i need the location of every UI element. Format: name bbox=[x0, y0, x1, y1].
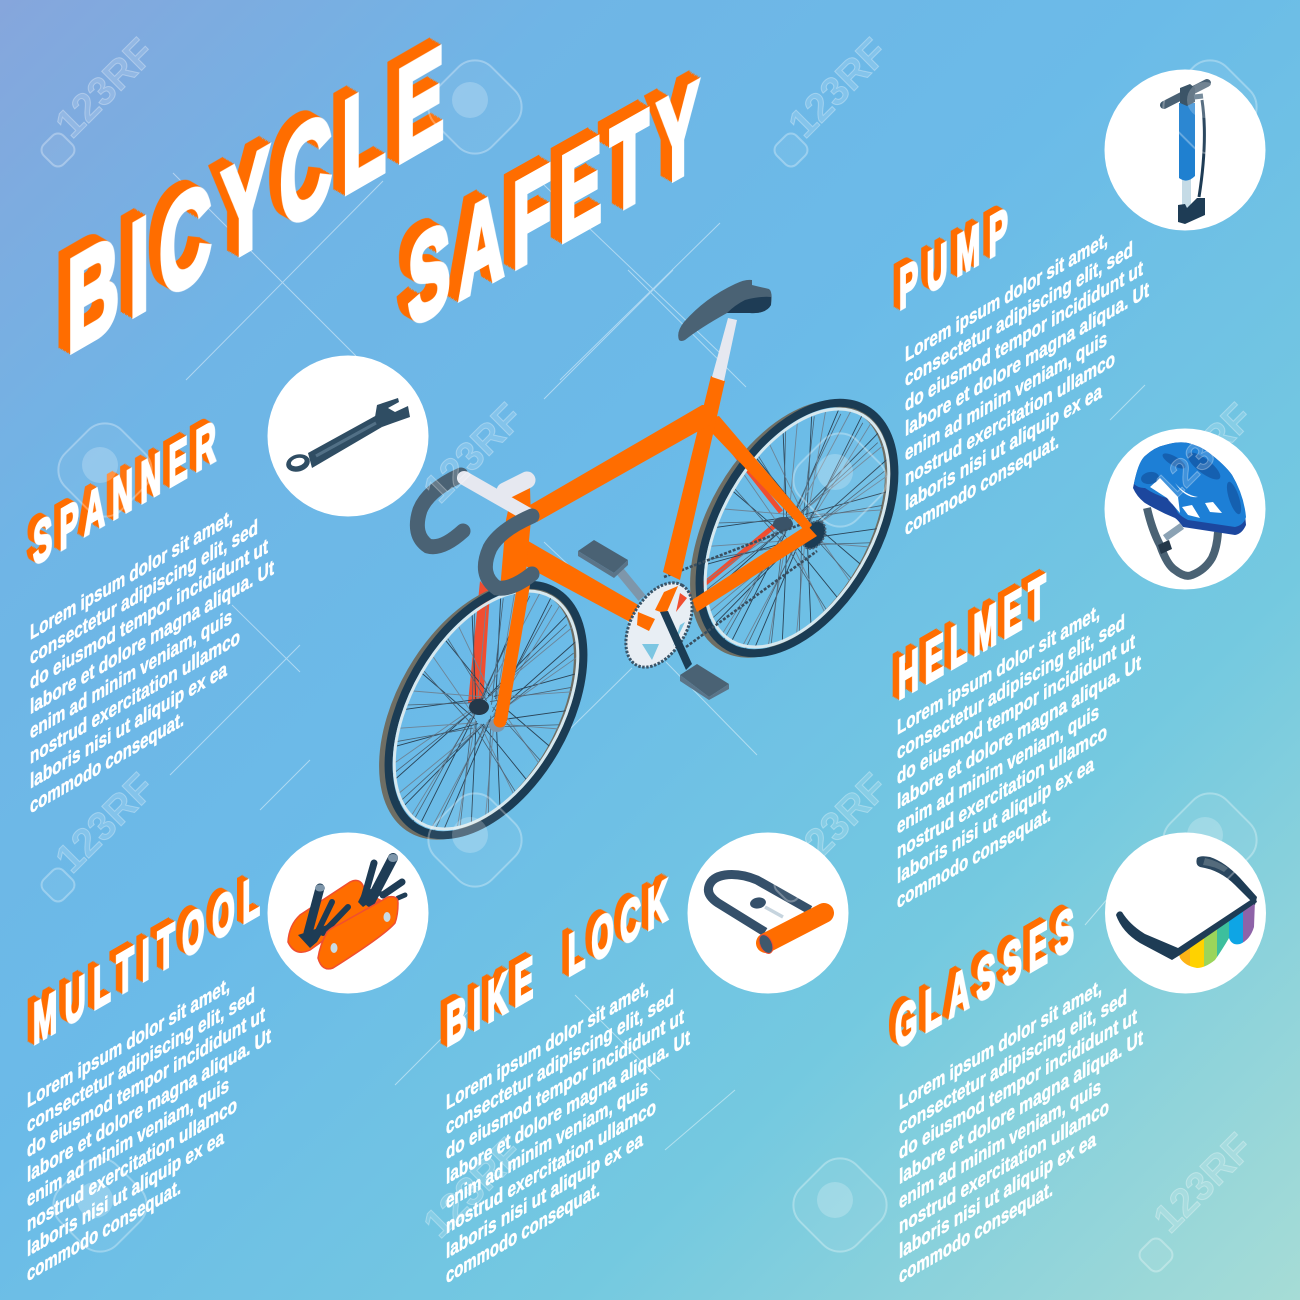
text block: bike lock: do eiusmod tempor incididunt ut bbox=[446, 1003, 684, 1164]
text block: spanner bbox=[30, 480, 274, 818]
text block: pump: labore et dolore magna aliqua. Ut bbox=[905, 276, 1149, 441]
frame bbox=[494, 376, 817, 728]
icon: pump bbox=[1104, 70, 1266, 230]
text block: helmet bbox=[897, 575, 1141, 913]
chain bbox=[664, 522, 817, 647]
text block: pump: nostrud exercitation ullamco bbox=[905, 345, 1115, 491]
far fork blade bbox=[468, 581, 490, 705]
text block: helmet: labore et dolore magna aliqua. Ut bbox=[897, 649, 1141, 814]
text block: bike lock: laboris nisi ut aliquip ex ea bbox=[446, 1126, 643, 1263]
far handlebar bbox=[417, 475, 463, 547]
text block: glasses: nostrud exercitation ullamco bbox=[899, 1093, 1109, 1239]
text block: pump bbox=[905, 202, 1149, 540]
text block: spanner: nostrud exercitation ullamco bbox=[30, 623, 240, 769]
heading: PUMP: PUMP bbox=[899, 196, 1008, 323]
text block: bike lock: enim ad minim veniam, quis bbox=[446, 1073, 648, 1214]
text block: helmet: Lorem ipsum dolor sit amet, bbox=[897, 598, 1100, 740]
text block: helmet: commodo consequat. bbox=[897, 800, 1051, 913]
text block: pump: Lorem ipsum dolor sit amet, bbox=[905, 225, 1108, 367]
text block: bike lock: Lorem ipsum dolor sit amet, bbox=[446, 973, 649, 1115]
text block: bike lock bbox=[446, 950, 690, 1288]
text block: glasses: labore et dolore magna aliqua. Ut bbox=[899, 1024, 1143, 1189]
title line: SAFETY: SAFETY bbox=[408, 56, 699, 355]
saddle bbox=[678, 280, 772, 341]
text block: helmet: do eiusmod tempor incididunt ut bbox=[897, 628, 1135, 789]
icon: glasses bbox=[1105, 832, 1266, 994]
source-image watermark overlay: 123RF bbox=[780, 30, 896, 146]
text block: multitool: do eiusmod tempor incididunt ut bbox=[27, 1001, 265, 1162]
heading: GLASSES: GLASSES bbox=[895, 895, 1074, 1063]
text block: spanner: laboris nisi ut aliquip ex ea bbox=[30, 656, 227, 793]
text block: helmet: nostrud exercitation ullamco bbox=[897, 718, 1107, 864]
heading: SPANNER: SPANNER bbox=[33, 409, 216, 579]
title bbox=[67, 18, 699, 383]
text block: spanner: enim ad minim veniam, quis bbox=[30, 603, 232, 744]
text block: spanner: consectetur adipiscing elit, sed bbox=[30, 514, 258, 669]
crank arm bbox=[660, 611, 692, 670]
source-image watermark overlay: 123RF bbox=[47, 765, 163, 881]
text block: spanner: do eiusmod tempor incididunt ut bbox=[30, 533, 268, 694]
text block: glasses: Lorem ipsum dolor sit amet, bbox=[899, 973, 1102, 1115]
stem bbox=[464, 478, 527, 514]
text block: spanner: labore et dolore magna aliqua. Ut bbox=[30, 554, 274, 719]
source-image watermark overlay: 123RF bbox=[415, 395, 531, 511]
text block: helmet: laboris nisi ut aliquip ex ea bbox=[897, 751, 1094, 888]
text block: bike lock: consectetur adipiscing elit, sed bbox=[446, 984, 674, 1139]
text block: glasses: consectetur adipiscing elit, sed bbox=[899, 984, 1127, 1139]
text block: multitool bbox=[27, 948, 271, 1286]
heading: MULTITOOL: MULTITOOL bbox=[33, 863, 260, 1058]
text block: pump: enim ad minim veniam, quis bbox=[905, 325, 1107, 466]
far rear stays bbox=[673, 440, 781, 610]
text block: pump: commodo consequat. bbox=[905, 427, 1059, 540]
rear wheel bbox=[648, 355, 946, 701]
text block: bike lock: commodo consequat. bbox=[446, 1175, 600, 1288]
text block: spanner: Lorem ipsum dolor sit amet, bbox=[30, 503, 233, 645]
text block: pump: do eiusmod tempor incididunt ut bbox=[905, 255, 1143, 416]
text block: multitool: Lorem ipsum dolor sit amet, bbox=[27, 971, 230, 1113]
text block: multitool: labore et dolore magna aliqua. Ut bbox=[27, 1022, 271, 1187]
text block: glasses: enim ad minim veniam, quis bbox=[899, 1073, 1101, 1214]
text block: glasses: commodo consequat. bbox=[899, 1175, 1053, 1288]
icon: multitool bbox=[268, 832, 428, 994]
text block: bike lock: labore et dolore magna aliqua. Ut bbox=[446, 1024, 690, 1189]
source-image watermark overlay: 123RF bbox=[47, 30, 163, 146]
chainring bbox=[612, 571, 706, 679]
text block: glasses bbox=[899, 950, 1143, 1288]
heading: HELMET: HELMET bbox=[898, 563, 1046, 713]
text block: pump: laboris nisi ut aliquip ex ea bbox=[905, 378, 1102, 515]
near handlebar bbox=[485, 516, 532, 588]
text block: helmet: enim ad minim veniam, quis bbox=[897, 698, 1099, 839]
icon: spanner bbox=[268, 356, 428, 516]
bicycle illustration bbox=[337, 280, 946, 883]
text block: multitool: nostrud exercitation ullamco bbox=[27, 1091, 237, 1237]
text block: helmet: consectetur adipiscing elit, sed bbox=[897, 609, 1125, 764]
text block: bike lock: nostrud exercitation ullamco bbox=[446, 1093, 656, 1239]
title line: BICYCLE: BICYCLE bbox=[67, 18, 444, 383]
text block: spanner: commodo consequat. bbox=[30, 705, 184, 818]
text block: multitool: enim ad minim veniam, quis bbox=[27, 1071, 229, 1212]
text block: glasses: do eiusmod tempor incididunt ut bbox=[899, 1003, 1137, 1164]
icon: bike lock bbox=[688, 832, 848, 994]
icon: helmet bbox=[1104, 428, 1266, 590]
source-image watermark overlay: 123RF bbox=[1145, 1125, 1261, 1241]
heading: BIKE LOCK: BIKE LOCK bbox=[446, 867, 668, 1060]
source-image watermark overlay: 123RF bbox=[780, 765, 896, 881]
seat post bbox=[712, 318, 737, 381]
source-image watermark overlay: 123RF bbox=[415, 1130, 531, 1246]
rear sprocket bbox=[798, 517, 830, 553]
far pedal and crank bbox=[578, 540, 642, 598]
text block: multitool: consectetur adipiscing elit, sed bbox=[27, 982, 255, 1137]
near pedal bbox=[680, 664, 729, 700]
text block: glasses: laboris nisi ut aliquip ex ea bbox=[899, 1126, 1096, 1263]
text block: pump: consectetur adipiscing elit, sed bbox=[905, 236, 1133, 391]
front wheel bbox=[337, 537, 635, 883]
text block: multitool: commodo consequat. bbox=[27, 1173, 181, 1286]
text block: multitool: laboris nisi ut aliquip ex ea bbox=[27, 1124, 224, 1261]
source-image watermark overlay: 123RF bbox=[1145, 395, 1261, 511]
background grid lines bbox=[170, 173, 1145, 1150]
